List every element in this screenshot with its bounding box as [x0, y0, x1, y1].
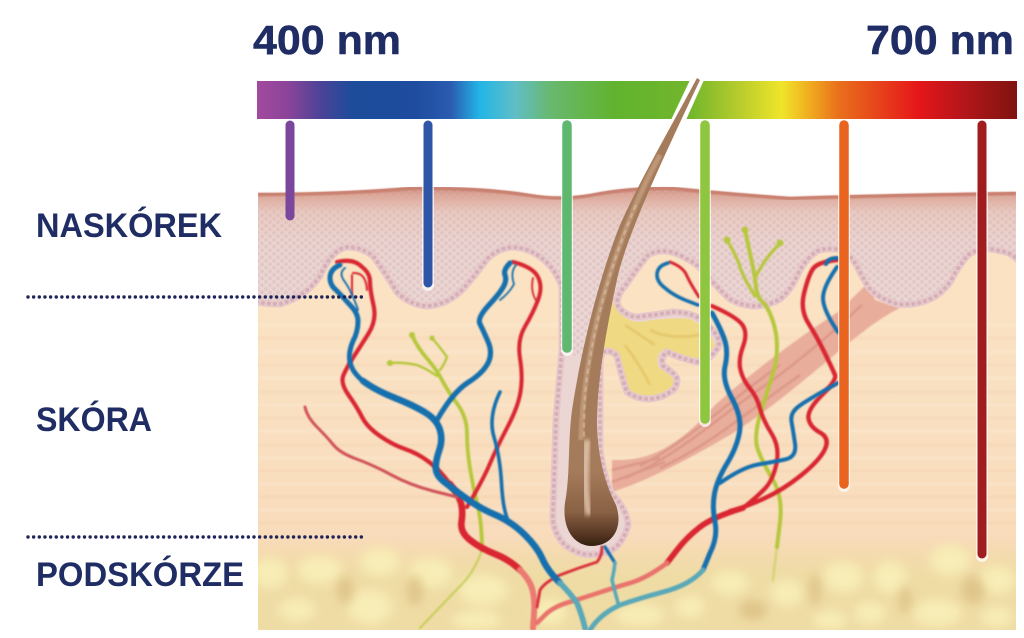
label: PODSKÓRZE: PODSKÓRZE — [36, 556, 244, 594]
beam: green — [562, 125, 572, 348]
hair gap in spectrum bar — [671, 80, 704, 120]
skin cross-section illustration — [253, 187, 1017, 630]
heading: 700 nm: 700 nm — [866, 17, 1014, 63]
arrector pili muscle — [612, 283, 900, 492]
sebaceous gland — [604, 302, 715, 396]
blood vessels: veins blue — [330, 258, 838, 630]
spectrum bar — [257, 81, 1017, 119]
basal cell border — [257, 247, 1017, 555]
dotted divider: dermis and subcutis — [28, 535, 366, 539]
fat layer: subcutis — [258, 545, 1016, 630]
light beams penetrating skin — [290, 125, 982, 556]
beam: orange — [839, 125, 849, 484]
dermis layer — [258, 250, 1016, 570]
beam: violet — [286, 125, 294, 216]
nerve fibres: green — [387, 227, 783, 628]
hair shaft and bulb — [564, 78, 700, 546]
dotted divider: epidermis and dermis — [28, 295, 366, 299]
beam: dark red — [978, 125, 986, 554]
heading: 400 nm: 400 nm — [253, 17, 401, 63]
surface edge — [258, 188, 1016, 198]
label: SKÓRA: SKÓRA — [36, 401, 152, 439]
beam: blue — [424, 125, 432, 283]
label: NASKÓREK: NASKÓREK — [36, 207, 222, 245]
beam: yellow-green — [700, 125, 710, 419]
epidermis layer with cells — [257, 187, 1017, 556]
blood vessels: arteries red — [305, 260, 837, 628]
